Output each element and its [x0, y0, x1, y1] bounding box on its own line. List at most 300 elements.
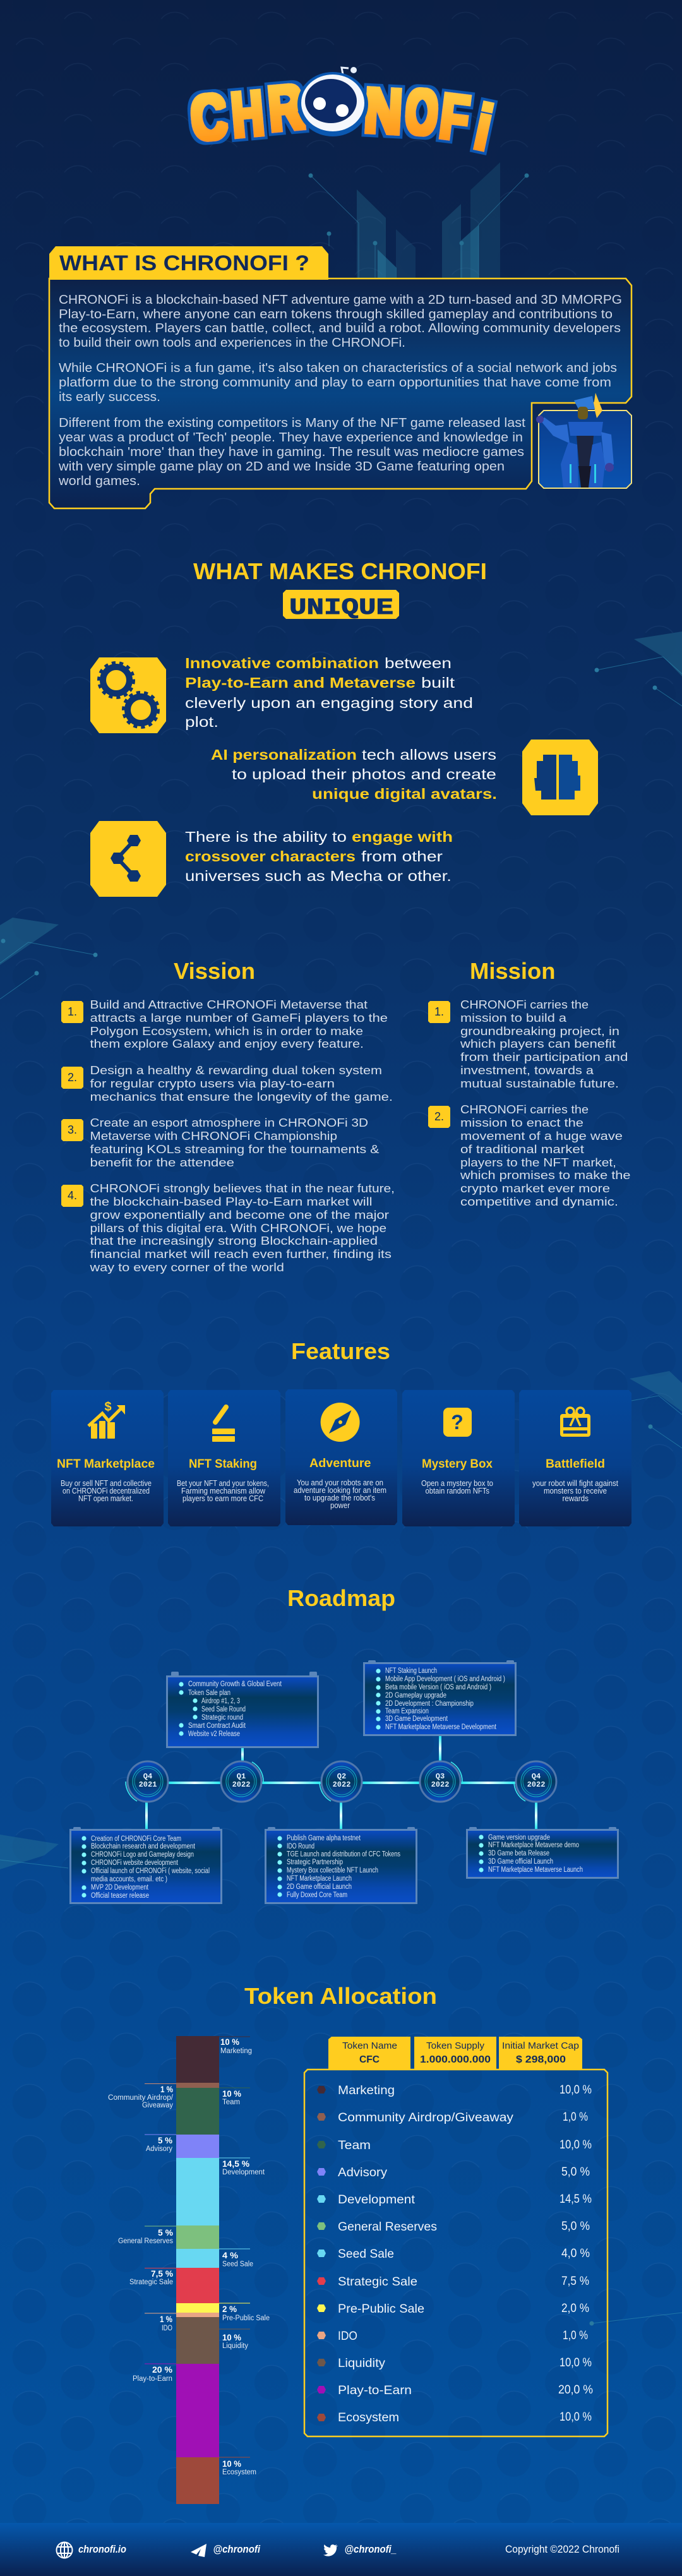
roadmap box: Q3 2022: Beta mobile Version ( iOS and Android ) [385, 1684, 491, 1691]
text: innovative combination: Play-to-Earn and Metaverse [185, 674, 416, 691]
logo: CHRONOFi: C [188, 81, 229, 154]
feature card: mystery box: obtain random NFTs [426, 1487, 489, 1495]
roadmap box: Q4 2022: Game version upgrade [488, 1834, 550, 1842]
row: development: Development [338, 2193, 416, 2207]
label: advisory 5%: 5 % [158, 2135, 173, 2145]
row: community airdrop: Community Airdrop/Giveaway [338, 2111, 514, 2124]
mission item 2: competitive and dynamic. [460, 1195, 618, 1208]
heading: roadmap: Roadmap [287, 1585, 395, 1611]
row: development: 14,5 % [559, 2193, 592, 2206]
icon: telegram plane [191, 2544, 206, 2557]
roadmap box: Q3 2022 [364, 1660, 515, 1735]
vission item 1: them explore Galaxy and enjoy every feature. [90, 1037, 364, 1050]
roadmap box: Q3 2022: Mobile App Development ( iOS and Android ) [385, 1675, 505, 1683]
text: innovative combination [185, 655, 473, 730]
roadmap box: Q4 2021: CHRONOFi Logo and Gameplay design [91, 1851, 194, 1859]
roadmap box: Q1 2022: Strategic round [201, 1714, 243, 1722]
text: crossover characters: crossover characters [185, 848, 356, 865]
logo: CHRONOFi: O [404, 76, 440, 148]
milestone: Q3 2022: Q3 [436, 1772, 445, 1781]
text: ai personalization [211, 746, 497, 802]
row: play-to-earn [317, 2383, 593, 2397]
robot character card [536, 393, 631, 488]
roadmap box: Q4 2022: 3D Game official Launch [488, 1858, 553, 1866]
label: marketing 10% [219, 2037, 252, 2055]
label: pre-public sale 2%: 2 % [222, 2304, 237, 2314]
label: development 14,5%: 14,5 % [222, 2159, 250, 2169]
mission item 2: of traditional market [460, 1142, 584, 1156]
mission item 1: CHRONOFi carries the [460, 998, 589, 1011]
vission item 2: Design a healthy & rewarding dual token system [90, 1063, 382, 1077]
vission item 1: attracts a large number of GameFi players to the [90, 1011, 388, 1024]
row: pre-public sale [317, 2302, 589, 2316]
milestone: Q4 2022: 2022 [527, 1780, 545, 1789]
feature card: nft marketplace: on CHRONOFi decentralized [63, 1487, 150, 1495]
icon: globe [57, 2542, 72, 2558]
label: community airdrop 1%: Community Airdrop/ [108, 2094, 174, 2102]
feature card: adventure: power [330, 1501, 350, 1510]
link: telegram: @chronofi [213, 2543, 261, 2555]
heading: token allocation: Token Allocation [244, 1983, 437, 2009]
label: marketing 10%: 10 % [220, 2037, 240, 2047]
feature card: battlefield: Battlefield [546, 1457, 605, 1471]
feature card: nft staking: NFT Staking [189, 1457, 257, 1471]
roadmap box: Q4 2022: 3D Game beta Release [488, 1850, 549, 1857]
vission item 2: mechanics that ensure the longevity of the game. [90, 1090, 393, 1103]
roadmap box: Q1 2022: Smart Contract Audit [188, 1722, 246, 1730]
roadmap box: Q2 2022 [265, 1827, 417, 1903]
feature card: nft marketplace [51, 1390, 164, 1526]
feature card: nft marketplace: Buy or sell NFT and collective [61, 1479, 152, 1488]
label: ecosystem 10%: Ecosystem [222, 2469, 256, 2476]
vission item 3: benefit for the attendee [90, 1156, 234, 1169]
row: development [317, 2193, 592, 2207]
text: crossover characters [185, 829, 453, 884]
feature card: mystery box: Mystery Box [422, 1457, 493, 1471]
mission item 1: from their participation and [460, 1050, 628, 1063]
label: seed sale 4% [219, 2249, 253, 2268]
row: ido: 1,0 % [563, 2329, 588, 2342]
feature card: nft marketplace: NFT Marketplace [57, 1457, 155, 1471]
roadmap box: Q1 2022: Community Growth & Global Event [188, 1680, 282, 1688]
label: general reserves 5%: General Reserves [118, 2238, 173, 2245]
feature card: battlefield [519, 1390, 631, 1526]
feature card: adventure: to upgrade the robot's [304, 1494, 375, 1502]
roadmap connector lines [145, 1736, 537, 1830]
roadmap box: Q2 2022: Publish Game alpha testnet [287, 1835, 361, 1842]
vission item 3: Create an esport atmosphere in CHRONOFi 3D [90, 1116, 368, 1129]
feature card: nft staking: Farming mechanism allow [181, 1487, 266, 1495]
row: team: 10,0 % [559, 2138, 592, 2152]
mission item 2 [428, 1103, 630, 1208]
icon: staking [212, 1407, 235, 1442]
roadmap box: Q2 2022: 2D Game official Launch [287, 1883, 352, 1891]
icon: mystery box: ? [451, 1411, 464, 1434]
label: ido 1%: IDO [162, 2325, 172, 2332]
label: team 10% [219, 2088, 250, 2106]
heading: mission: Mission [470, 958, 556, 984]
heading: vission: Vission [174, 958, 255, 984]
text: ai personalization: AI personalization [211, 746, 357, 763]
mission item 2: mission to enact the [460, 1116, 583, 1129]
heading tab: what is chronofi [49, 246, 328, 280]
vission item 3: featuring KOLs streaming for the tournaments & [90, 1142, 380, 1156]
vission item 4: way to every corner of the world [89, 1261, 284, 1274]
token info tab: token supply: Token Supply [426, 2040, 485, 2051]
robot character [536, 393, 614, 488]
roadmap box: Q3 2022: 2D Gameplay upgrade [385, 1692, 446, 1699]
decoration: right shard near features [630, 1371, 682, 1448]
vission item 1: Build and Attractive CHRONOFi Metaverse that [90, 998, 368, 1011]
label: general reserves 5%: 5 % [158, 2227, 174, 2238]
vission item 3: Metaverse with CHRONOFi Championship [90, 1129, 337, 1142]
mission item 1: groundbreaking project, in [460, 1024, 619, 1038]
roadmap box: Q4 2022: NFT Marketplace Metaverse demo [488, 1842, 579, 1849]
feature card: adventure: adventure looking for an item [294, 1486, 386, 1495]
roadmap box: Q1 2022: Token Sale plan [188, 1689, 230, 1697]
text: ai personalization: unique digital avatars. [312, 786, 497, 802]
icon: mystery box [443, 1408, 472, 1437]
intro text: to build their own tools and experiences in the CHRONOFi. [59, 336, 405, 350]
label: advisory 5% [145, 2135, 176, 2153]
intro text: Different from the existing competitors is Many of the NFT game released last [59, 416, 525, 430]
text: innovative combination: between [385, 655, 452, 671]
row: advisory: 5,0 % [561, 2166, 590, 2179]
item: ai personalization [211, 740, 598, 815]
row: ecosystem [317, 2411, 592, 2424]
link: website: chronofi.io [78, 2543, 126, 2555]
feature card: battlefield: rewards [562, 1494, 589, 1503]
roadmap box: Q1 2022: Airdrop #1, 2, 3 [201, 1698, 240, 1705]
roadmap box: Q1 2022: Seed Sale Round [201, 1706, 246, 1713]
label: pre-public sale 2%: Pre-Public Sale [222, 2315, 270, 2322]
footer [0, 2523, 682, 2576]
item: innovative combination [90, 655, 473, 733]
label: pre-public sale 2% [219, 2303, 270, 2322]
label: ecosystem 10%: 10 % [222, 2459, 242, 2469]
roadmap box: Q4 2021: Official launch of CHRONOFi ( website, social [91, 1867, 210, 1875]
label: community airdrop 1% [108, 2084, 176, 2109]
token info tab: token supply [414, 2037, 496, 2070]
icon: gears [90, 657, 166, 733]
vission item 3: 3. [68, 1123, 77, 1136]
logo: CHRONOFi: R [265, 71, 306, 145]
row: play-to-earn: Play-to-Earn [338, 2384, 412, 2397]
label: seed sale 4%: 4 % [222, 2250, 239, 2260]
label: strategic sale 7,5% [129, 2268, 176, 2286]
label: play-to-earn 20% [133, 2364, 176, 2383]
row: liquidity: Liquidity [338, 2357, 386, 2370]
row: liquidity [317, 2356, 592, 2370]
milestone: Q4 2021: 2021 [139, 1780, 157, 1789]
label: community airdrop 1%: Giveaway [142, 2102, 173, 2109]
feature card: adventure: You and your robots are on [297, 1478, 383, 1487]
text: crossover characters: engage with [352, 829, 453, 845]
vission item 4: grow exponentially and become one of the major [90, 1208, 389, 1221]
icon: twitter bird [323, 2544, 338, 2556]
roadmap box: Q2 2022: NFT Marketplace Launch [287, 1875, 352, 1883]
panel: what is chronofi [49, 246, 631, 508]
vission item 1 [61, 998, 388, 1050]
text: crossover characters: There is the ability to [185, 829, 347, 845]
token info tab: token name [328, 2037, 410, 2070]
token info tab: token supply: 1.000.000.000 [420, 2054, 491, 2065]
token info tab: token name: Token Name [342, 2040, 397, 2051]
icon: gift box [560, 1408, 590, 1437]
bar segments [176, 2036, 219, 2504]
roadmap box: Q4 2021: media accounts, email. etc ) [91, 1876, 167, 1883]
intro text: its early success. [59, 390, 160, 404]
vission item 4 [61, 1182, 395, 1274]
token info tab: initial market cap [499, 2037, 582, 2070]
row: general reserves: General Reserves [338, 2220, 437, 2234]
label: liquidity 10%: Liquidity [222, 2342, 248, 2350]
milestone: Q4 2022: Q4 [532, 1772, 541, 1781]
decoration: left shard near roadmap [0, 1835, 68, 1869]
row: general reserves [317, 2220, 590, 2234]
row: ecosystem: 10,0 % [559, 2411, 592, 2424]
row: play-to-earn: 20,0 % [558, 2383, 593, 2397]
roadmap box: Q3 2022: NFT Staking Launch [385, 1667, 437, 1675]
row: strategic sale: 7,5 % [561, 2275, 589, 2288]
badge: unique [283, 590, 399, 621]
feature card: adventure [285, 1389, 397, 1525]
decoration: city towers behind intro panel [308, 162, 529, 279]
feature card: mystery box: Open a mystery box to [421, 1479, 493, 1488]
milestone: Q2 2022 [320, 1761, 362, 1802]
mission item 2: movement of a huge wave [460, 1129, 623, 1142]
item: crossover characters [90, 821, 453, 897]
row: advisory: Advisory [338, 2166, 388, 2179]
mission item 2: 2. [434, 1110, 444, 1123]
label: community airdrop 1%: 1 % [160, 2084, 173, 2094]
row: marketing: Marketing [338, 2084, 395, 2097]
text: crossover characters: universes such as Mecha or other. [185, 868, 452, 884]
row: seed sale: 4,0 % [561, 2247, 590, 2260]
vission item 4: financial market will reach even further, finding its [90, 1247, 392, 1261]
mission item 2: crypto market ever more [460, 1182, 610, 1195]
roadmap box: Q4 2022: NFT Marketplace Metaverse Launch [488, 1866, 583, 1874]
vission item 4: 4. [68, 1189, 77, 1202]
token info tab: initial market cap: $ 298,000 [516, 2054, 566, 2065]
feature card: mystery box [402, 1390, 515, 1526]
text: ai personalization: tech allows users [362, 746, 496, 763]
milestone: Q2 2022: 2022 [333, 1780, 350, 1789]
feature card: nft staking [168, 1390, 280, 1526]
label: liquidity 10%: 10 % [222, 2332, 242, 2342]
token info tab: initial market cap: Initial Market Cap [502, 2040, 579, 2051]
label: ido 1%: 1 % [160, 2314, 172, 2324]
decoration: right shard near unique section [595, 632, 682, 706]
roadmap box: Q2 2022: IDO Round [287, 1843, 314, 1850]
panel: vission [61, 958, 395, 1274]
label: liquidity 10% [219, 2329, 250, 2350]
intro text: world games. [58, 474, 140, 488]
intro text: the ecosystem. Players can battle, collect, and build a robot. Allowing community developers [59, 321, 621, 335]
intro text: with very simple game play on 2D and we Inside 3D Game featuring open [58, 460, 505, 474]
roadmap box: Q4 2021: CHRONOFi website development [91, 1859, 179, 1867]
roadmap box: Q3 2022: Team Expansion [385, 1708, 429, 1715]
logo: CHRONOFi: N [362, 75, 404, 148]
row: community airdrop: 1,0 % [563, 2111, 588, 2124]
text: innovative combination: cleverly upon an engaging story and [185, 695, 473, 711]
logo: CHRONOFi [188, 67, 498, 164]
roadmap box: Q2 2022: TGE Launch and distribution of CFC Tokens [287, 1851, 400, 1859]
icon: compass [321, 1403, 360, 1442]
mission item 1: mission to build a [460, 1011, 567, 1024]
label: advisory 5%: Advisory [146, 2145, 172, 2153]
text: innovative combination: built [421, 674, 455, 691]
roadmap box: Q2 2022: Fully Doxed Core Team [287, 1891, 347, 1899]
vission item 4: the blockchain-based Play-to-Earn market will [90, 1195, 373, 1208]
logo: CHRONOFi: H [229, 78, 266, 151]
vission item 4: pillars of this digital era. With CHRONOFi, we hope [90, 1221, 386, 1235]
row: liquidity: 10,0 % [559, 2356, 592, 2369]
row: pre-public sale: 2,0 % [561, 2302, 589, 2315]
logo: CHRONOFi: F [436, 81, 473, 154]
text: ai personalization: to upload their photos and create [232, 766, 496, 782]
feature card: nft staking: Bet your NFT and your tokens, [177, 1479, 269, 1488]
feature card: nft marketplace: NFT open market. [78, 1494, 133, 1503]
milestone: Q4 2022 [514, 1761, 556, 1802]
text: crossover characters: from other [361, 848, 443, 865]
mission item 1: investment, towards a [460, 1063, 594, 1077]
row: marketing: 10,0 % [559, 2083, 592, 2097]
roadmap box: Q3 2022: 3D Game Development [385, 1715, 448, 1723]
roadmap box: Q3 2022: NFT Marketplace Metaverse Development [385, 1723, 497, 1731]
row: seed sale: Seed Sale [338, 2248, 394, 2261]
roadmap box: Q4 2021: Official teaser release [91, 1892, 149, 1900]
text: innovative combination: plot. [185, 714, 218, 730]
row: strategic sale: Strategic Sale [338, 2275, 417, 2289]
mission item 2: which promises to make the [460, 1168, 630, 1182]
row: team: Team [338, 2139, 371, 2152]
milestone: Q4 2021: Q4 [143, 1772, 152, 1781]
intro text: While CHRONOFi is a fun game, it's also taken on characteristics of a social network and jobs [59, 361, 617, 375]
roadmap box: Q1 2022: Website v2 Release [188, 1730, 240, 1738]
label: play-to-earn 20%: Play-to-Earn [133, 2375, 172, 2383]
vission item 1: 1. [68, 1005, 77, 1018]
roadmap box: Q2 2022: Strategic Partnership [287, 1859, 343, 1866]
heading: what makes chronofi: WHAT MAKES CHRONOFI [193, 558, 487, 584]
label: marketing 10%: Marketing [220, 2047, 252, 2055]
stacked bar chart: token allocation [108, 2036, 270, 2504]
feature card: battlefield: monsters to receive [544, 1487, 607, 1495]
copyright: Copyright ©2022 Chronofi [505, 2543, 619, 2555]
row: general reserves: 5,0 % [561, 2220, 590, 2233]
label: team 10%: Team [222, 2099, 240, 2106]
vission item 2 [61, 1063, 393, 1103]
vission item 2: for regular crypto users via play-to-earn [90, 1077, 335, 1090]
mission item 1: 1. [434, 1005, 444, 1018]
label: strategic sale 7,5%: Strategic Sale [129, 2279, 173, 2286]
icon: market chart [88, 1400, 125, 1439]
logo robot head [297, 67, 368, 136]
icon: share nodes [90, 821, 166, 897]
intro text: year was a product of 'Tech' people. They have experience and knowledge in [59, 431, 523, 445]
milestone: Q1 2022 [221, 1761, 263, 1802]
feature card: nft staking: players to earn more CFC [182, 1494, 263, 1503]
milestone: Q3 2022 [420, 1761, 462, 1802]
milestone: Q4 2021 [126, 1761, 168, 1802]
vission item 4: CHRONOFi strongly believes that in the near future, [90, 1182, 395, 1195]
label: strategic sale 7,5%: 7,5 % [151, 2268, 174, 2279]
intro text [58, 293, 622, 488]
intro text: Play-to-Earn, where anyone can earn tokens through skilled gameplay and contributions to [59, 308, 613, 321]
roadmap box: Q2 2022: Mystery Box collectible NFT Launch [287, 1867, 378, 1874]
roadmap box: Q4 2021 [71, 1827, 221, 1903]
label: seed sale 4%: Seed Sale [222, 2261, 253, 2268]
label: development 14,5%: Development [222, 2169, 265, 2176]
label: general reserves 5% [118, 2226, 176, 2245]
row: ecosystem: Ecosystem [338, 2411, 399, 2424]
mission item 1: mutual sustainable future. [460, 1077, 619, 1090]
row: ido: IDO [338, 2330, 357, 2343]
row: ido [317, 2329, 588, 2343]
row: pre-public sale: Pre-Public Sale [338, 2303, 424, 2316]
milestone: Q1 2022: Q1 [237, 1772, 246, 1781]
milestone: Q2 2022: Q2 [337, 1772, 346, 1781]
decoration: dot near allocation panel [590, 2313, 682, 2325]
icon: brain [522, 740, 598, 815]
panel: allocation table [304, 2070, 607, 2436]
label: ido 1% [145, 2313, 176, 2332]
roadmap box: Q1 2022 [167, 1672, 318, 1747]
label: team 10%: 10 % [222, 2088, 242, 2099]
heading: features: Features [291, 1338, 390, 1364]
row: advisory [317, 2166, 590, 2179]
feature card: battlefield: your robot will fight against [532, 1479, 618, 1488]
label: ecosystem 10% [219, 2457, 256, 2476]
roadmap box: Q4 2021: Blockchain research and development [91, 1843, 196, 1850]
mission item 2: CHRONOFi carries the [460, 1103, 589, 1116]
mission item 1 [428, 998, 628, 1090]
roadmap box: Q4 2021: Creation of CHRONOFi Core Team [91, 1835, 181, 1843]
roadmap box: Q3 2022: 2D Development : Championship [385, 1700, 474, 1708]
panel: mission [428, 958, 630, 1208]
intro text: platform due to the strong community and play to earn opportunities that have come from [59, 376, 611, 390]
decoration: left shard near vision section [0, 918, 97, 999]
intro text: CHRONOFi is a blockchain-based NFT adventure game with a 2D turn-based and 3D MMORPG [59, 293, 622, 307]
heading tab: what is chronofi: WHAT IS CHRONOFI ? [59, 251, 309, 275]
vission item 2: 2. [68, 1071, 77, 1084]
intro text: blockchain 'more' than they have in gaming. The result was mediocre games [59, 445, 524, 459]
roadmap box: Q4 2021: MVP 2D Development [91, 1884, 149, 1891]
vission item 1: Polygon Ecosystem, which is in order to make [90, 1024, 363, 1038]
icon: market chart: $ [104, 1400, 112, 1414]
label: development 14,5% [219, 2158, 265, 2176]
vission item 3 [61, 1116, 380, 1169]
row: team [317, 2138, 592, 2152]
row: strategic sale [317, 2275, 589, 2289]
milestone: Q1 2022: 2022 [232, 1780, 250, 1789]
milestone: Q3 2022: 2022 [431, 1780, 449, 1789]
feature card: adventure: Adventure [309, 1456, 371, 1470]
row: seed sale [317, 2247, 590, 2261]
badge: unique: UNIQUE [289, 595, 393, 621]
link: twitter: @chronofi_ [345, 2543, 397, 2555]
vission item 4: that the increasingly strong Blockchain-applied [90, 1234, 378, 1247]
mission item 2: players to the NFT market, [460, 1156, 616, 1169]
row: community airdrop [317, 2111, 588, 2124]
label: play-to-earn 20%: 20 % [152, 2364, 173, 2375]
roadmap box: Q4 2022 [467, 1827, 618, 1878]
token info tab: token name: CFC [359, 2054, 380, 2065]
mission item 1: which players can benefit [460, 1037, 616, 1050]
row: marketing [317, 2083, 592, 2097]
logo: CHRONOFi: i [469, 92, 498, 164]
text: innovative combination: Innovative combination [185, 655, 379, 671]
